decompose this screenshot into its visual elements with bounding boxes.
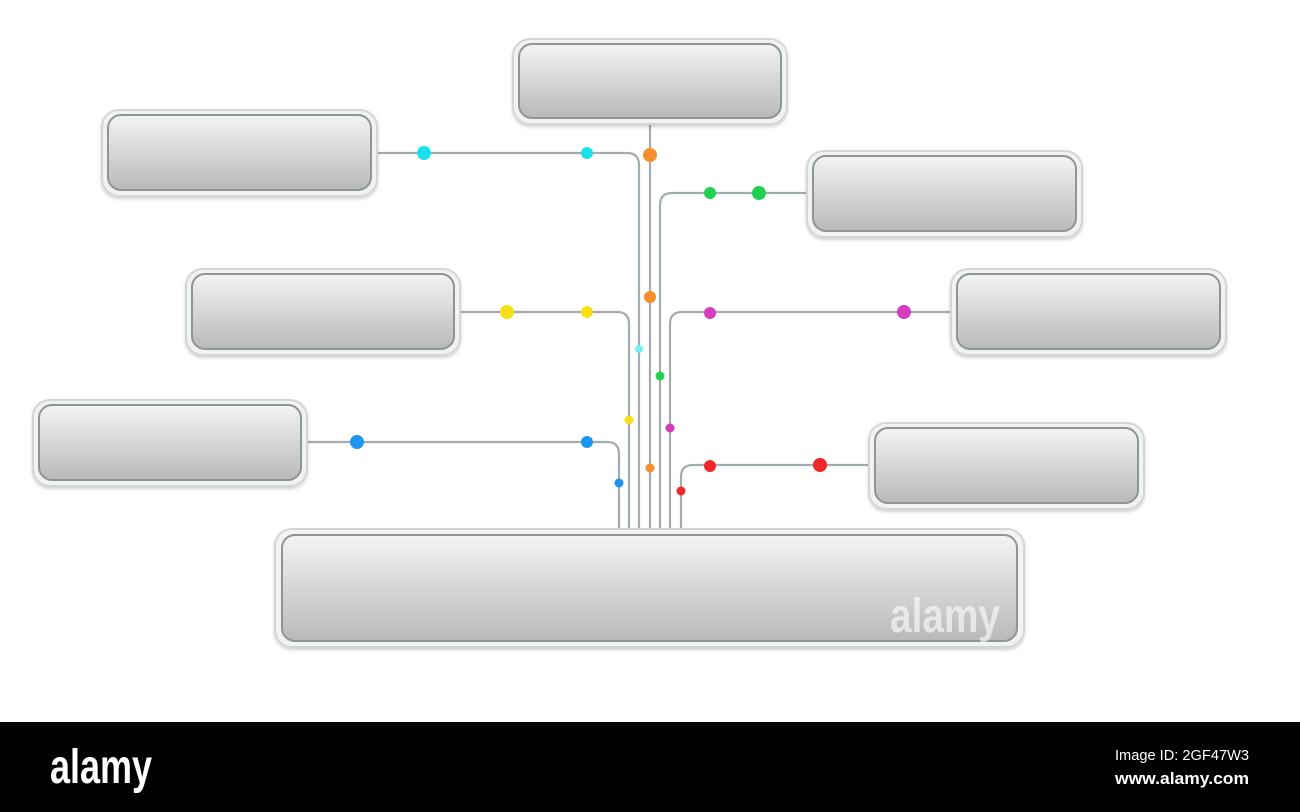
box: right 2 [951, 269, 1226, 355]
footer bar [0, 722, 1300, 812]
watermark: alamy [890, 590, 1000, 643]
box: right 3 [869, 423, 1144, 509]
footer logo: alamy [50, 741, 152, 794]
box: left 1 [102, 110, 377, 196]
box: top [513, 39, 787, 124]
footer id: Image ID: 2GF47W3 [1115, 747, 1249, 764]
connector lines [307, 124, 951, 528]
box: left 2 [186, 269, 460, 355]
box: bottom [275, 529, 1024, 647]
box: left 3 [33, 400, 307, 486]
box: right 1 [807, 151, 1082, 237]
footer url: www.alamy.com [1114, 769, 1249, 788]
dots [350, 146, 911, 496]
